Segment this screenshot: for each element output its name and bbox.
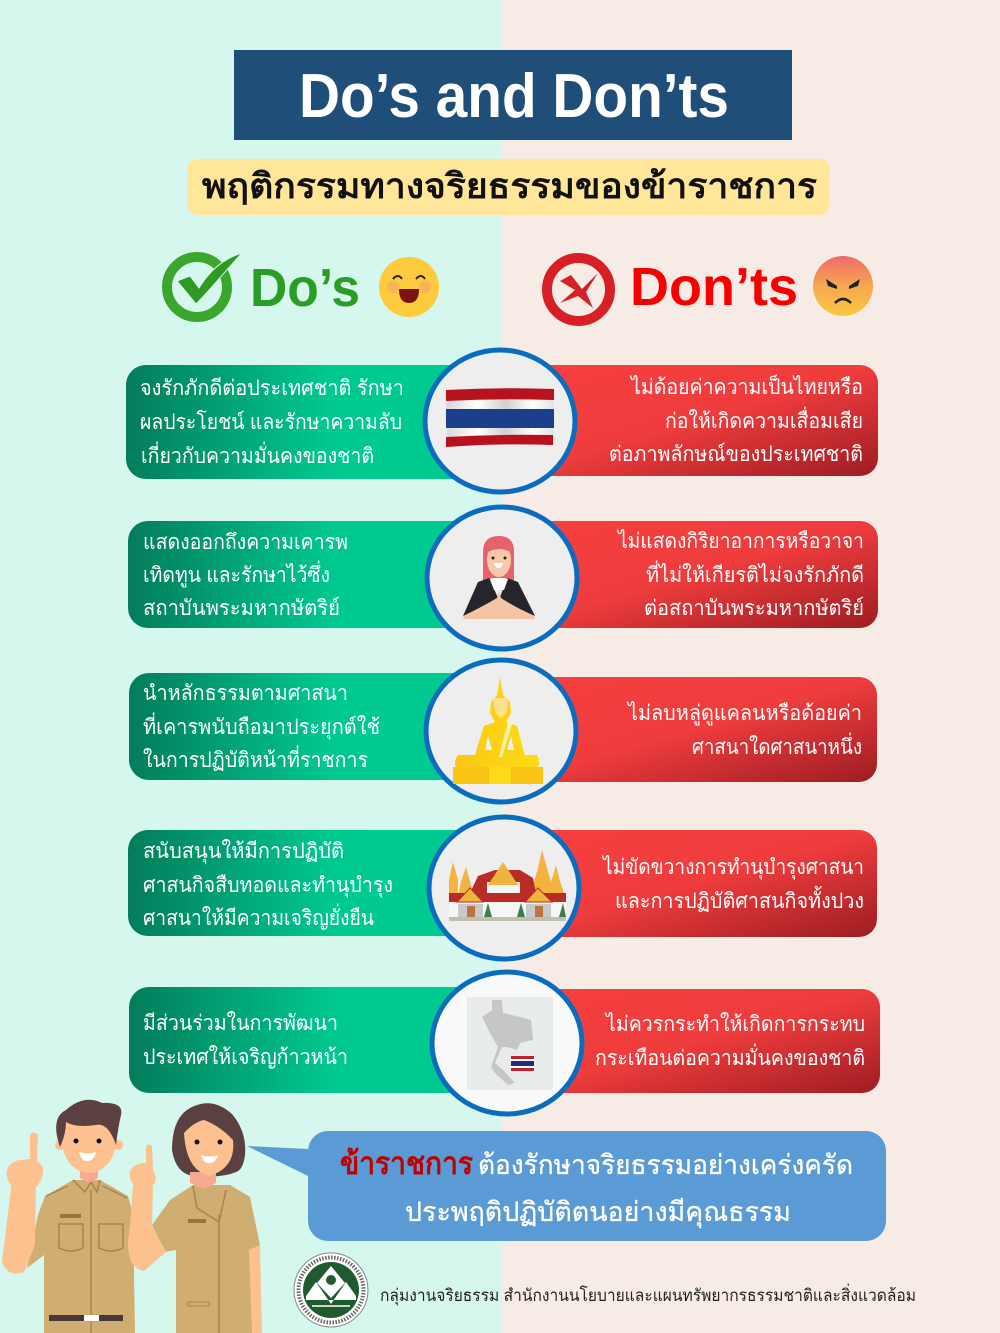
background: don'ts side	[501, 0, 1000, 1333]
row 5: do	[129, 987, 503, 1093]
row 3 circle: golden buddha	[426, 660, 576, 802]
row 2: don't: ต่อสถาบันพระมหากษัตริย์	[644, 596, 864, 620]
icon: happy face	[379, 257, 439, 317]
callout: ต้องรักษาจริยธรรมอย่างเคร่งครัด	[478, 1150, 853, 1180]
row 1: do: เกี่ยวกับความมั่นคงของชาติ	[141, 441, 374, 468]
row 1: do	[126, 365, 496, 479]
row 5: do: มีส่วนร่วมในการพัฒนา	[143, 1011, 338, 1035]
subtitle banner	[187, 159, 830, 215]
row 5: don't: ไม่ควรกระทำให้เกิดการกระทบ	[604, 1012, 865, 1036]
row 2: don't: ที่ไม่ให้เกียรติไม่จงรักภักดี	[646, 560, 864, 587]
row 3: do: ในการปฏิบัติหน้าที่ราชการ	[143, 745, 368, 772]
row 2: do: แสดงออกถึงความเคารพ	[143, 531, 348, 554]
row 1 circle: thai flag	[425, 350, 575, 492]
title banner	[234, 50, 792, 140]
row 2: do: สถาบันพระมหากษัตริย์	[143, 596, 340, 620]
footer text: กลุ่มงานจริยธรรม สำนักงานนโยบายและแผนทรัพยากรธรรมชาติและสิ่งแวดล้อม	[380, 1283, 916, 1306]
row 1: don't: ต่อภาพลักษณ์ของประเทศชาติ	[609, 442, 863, 466]
icon: green check	[167, 253, 242, 317]
heading: don'ts	[547, 256, 873, 321]
row 3: do: นำหลักธรรมตามศาสนา	[143, 682, 348, 705]
row 1: do: จงรักภักดีต่อประเทศชาติ รักษา	[140, 377, 404, 400]
callout: ประพฤติปฏิบัติตนอย่างมีคุณธรรม	[405, 1197, 791, 1229]
callout	[247, 1131, 886, 1241]
icon: red cross	[547, 258, 610, 321]
row 3: don't	[510, 677, 877, 782]
row 4: don't: ไม่ขัดขวางการทำนุบำรุงศาสนา	[601, 855, 864, 880]
icon: angry face	[813, 256, 873, 316]
heading: do's	[167, 253, 439, 318]
row 2: don't: ไม่แสดงกิริยาอาการหรือวาจา	[616, 529, 864, 553]
row 5 circle: thailand map	[432, 972, 582, 1114]
illustration: female officer	[128, 1103, 262, 1333]
row 2: do	[128, 521, 498, 628]
row 2 circle: woman greeting	[427, 507, 577, 649]
row 1: don't	[510, 365, 878, 476]
title banner: Do’s and Don’ts	[299, 62, 729, 131]
row 1: do: ผลประโยชน์ และรักษาความลับ	[140, 410, 402, 434]
row 3: do	[129, 673, 499, 780]
row 2: do: เทิดทูน และรักษาไว้ซึ่ง	[143, 560, 330, 588]
row 4: do: สนับสนุนให้มีการปฏิบัติ	[143, 839, 344, 864]
callout: ข้าราชการ	[340, 1146, 473, 1181]
row 5: don't	[515, 989, 880, 1093]
heading: don'ts: Don’ts	[630, 257, 798, 317]
row 4: do: ศาสนกิจสืบทอดและทำนุบำรุง	[143, 874, 393, 898]
heading: do's: Do’s	[250, 258, 360, 318]
row 4 circle: temple	[429, 817, 579, 959]
row 5: don't: กระเทือนต่อความมั่นคงของชาติ	[595, 1043, 865, 1070]
row 4: do: ศาสนาให้มีความเจริญยั่งยืน	[143, 903, 374, 930]
row 1: don't: ไม่ด้อยค่าความเป็นไทยหรือ	[629, 373, 863, 399]
row 4: don't: และการปฏิบัติศาสนกิจทั้งปวง	[615, 886, 864, 913]
row 5: do: ประเทศให้เจริญก้าวหน้า	[143, 1045, 348, 1069]
row 4: don't	[510, 830, 877, 937]
row 3: don't: ศาสนาใดศาสนาหนึ่ง	[692, 732, 862, 759]
background: do's side	[0, 0, 501, 1333]
row 4: do	[128, 830, 500, 936]
row 2: don't	[510, 521, 878, 628]
logo	[294, 1253, 368, 1327]
subtitle banner: พฤติกรรมทางจริยธรรมของข้าราชการ	[202, 167, 817, 206]
row 3: do: ที่เคารพนับถือมาประยุกต์ใช้	[143, 712, 380, 740]
illustration: male officer	[2, 1100, 135, 1333]
row 1: don't: ก่อให้เกิดความเสื่อมเสีย	[665, 406, 863, 433]
row 3: don't: ไม่ลบหลู่ดูแคลนหรือด้อยค่า	[626, 701, 862, 726]
